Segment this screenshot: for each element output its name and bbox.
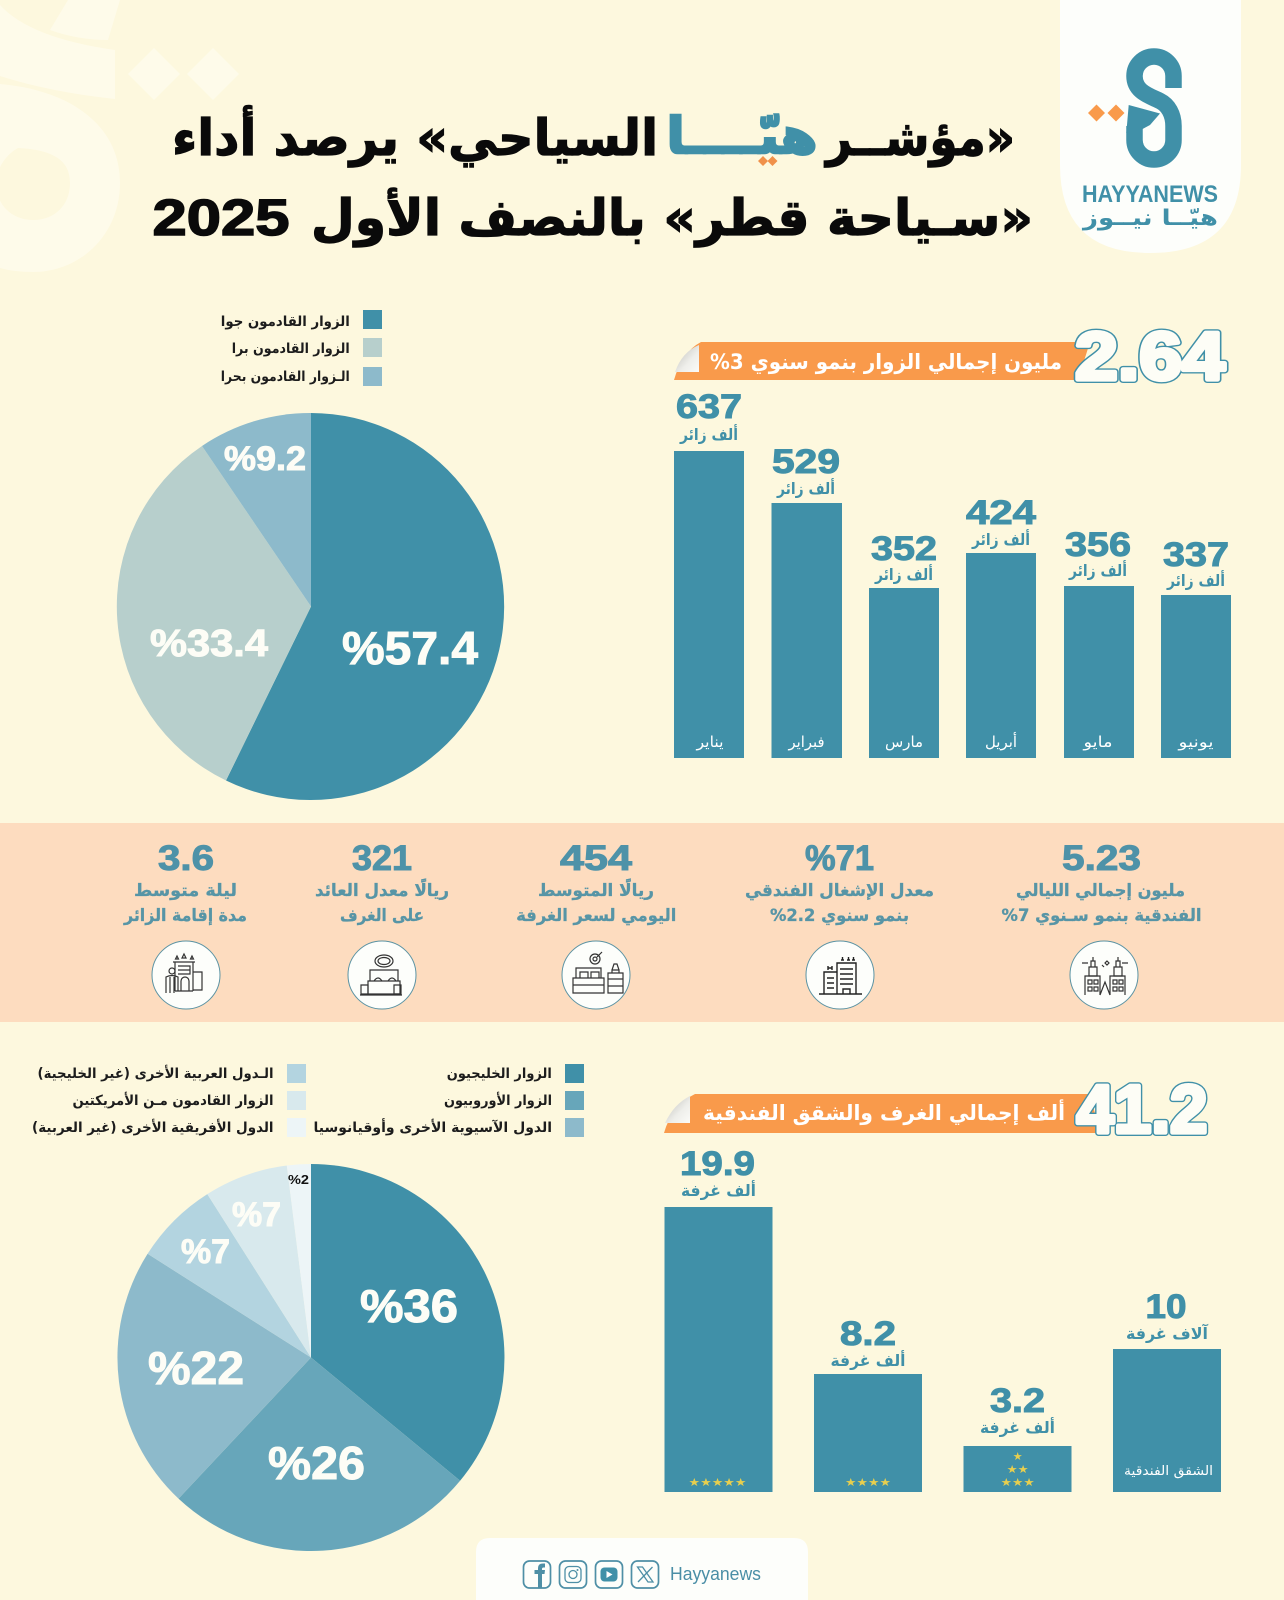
bar chart: rooms by category	[664, 1145, 1221, 1492]
header: total visitors: مليون إجمالي الزوار بنمو سنوي 3%	[710, 350, 1062, 375]
header: total rooms	[664, 1072, 1208, 1148]
title: «مؤشــر	[823, 109, 1015, 168]
stat: average stay: مدة إقامة الزائر	[123, 906, 247, 926]
stat: occupancy: بنمو سنوي 2.2%	[770, 906, 909, 926]
stat: revenue per room	[315, 839, 449, 1009]
stat: revenue per room: 321	[352, 839, 412, 878]
bar chart: rooms by category: ★★★★	[845, 1476, 891, 1489]
stat: revenue per room: ريالًا معدل العائد	[315, 877, 449, 901]
icon: page curl	[665, 1096, 690, 1123]
big number: 41.2	[1076, 1072, 1208, 1148]
big number: 41.2	[1076, 1072, 1208, 1148]
bar chart: monthly visitors: ألف زائر	[1166, 570, 1225, 590]
big number: 2.64	[1075, 318, 1225, 394]
title	[152, 105, 1033, 248]
bar chart: monthly visitors: ألف زائر	[679, 424, 738, 444]
icon: facebook	[524, 1561, 550, 1588]
bar chart: rooms by category: ★	[1013, 1450, 1023, 1463]
ribbon	[664, 1094, 1100, 1133]
pie chart: visitor origin: %7	[181, 1233, 230, 1271]
bar chart: monthly visitors: ألف زائر	[971, 529, 1030, 549]
legend: visitor origin: الـدول العربية الأخرى (غير الخليجية)	[38, 1065, 274, 1082]
stat: hotel nights: 5.23	[1062, 839, 1141, 878]
bar chart: monthly visitors: فبراير	[788, 733, 824, 751]
bar chart: monthly visitors: 637	[676, 388, 742, 426]
legend: arrivals by mode: الـزوار القادمون بحرا	[221, 369, 350, 385]
legend: visitor origin: الدول الأفريقية الأخرى (غير العربية)	[32, 1119, 274, 1136]
title: 2025	[152, 189, 290, 246]
stat: average stay	[123, 839, 247, 1009]
icon: logo mark	[1088, 56, 1174, 160]
pie chart: visitor origin: %7	[232, 1196, 281, 1234]
title: هيّــــا	[666, 107, 818, 165]
title: «سـياحة قطر» بالنصف الأول	[311, 187, 1033, 248]
icon: page curl	[675, 345, 699, 372]
stat: hotel nights: مليون إجمالي الليالي	[1016, 881, 1185, 901]
pie chart: visitor origin: %2	[288, 1172, 309, 1187]
icon: instagram	[560, 1561, 586, 1588]
stat: average stay: ليلة متوسط	[134, 881, 237, 901]
legend: arrivals by mode: الزوار القادمون جوا	[221, 314, 350, 330]
stat: average stay: 3.6	[158, 839, 214, 878]
legend: visitor origin: الزوار القادمون مـن الأمريكتين	[72, 1092, 274, 1109]
pie chart: visitor origin: %26	[268, 1437, 365, 1489]
pie chart: arrivals by mode	[117, 413, 504, 800]
stat: average daily rate	[516, 839, 676, 1009]
footer: social links	[476, 1538, 808, 1600]
title: السياحي» يرصد أداء	[172, 105, 658, 168]
bar chart: monthly visitors: يناير	[695, 733, 724, 751]
bar chart: rooms by category: ★★	[1007, 1463, 1029, 1476]
bar chart: rooms by category: ★★★	[1001, 1476, 1035, 1489]
bar chart: rooms by category: ألف غرفة	[830, 1350, 906, 1370]
logo panel	[1060, 0, 1241, 253]
stat: revenue per room: على الغرف	[340, 906, 424, 926]
bar chart: rooms by category: ألف غرفة	[681, 1180, 756, 1200]
logo wordmark arabic: هيّــا نيــوز	[1082, 206, 1218, 231]
legend: visitor origin: الزوار الأوروبيون	[444, 1092, 552, 1109]
pie chart: visitor origin: %36	[360, 1280, 458, 1332]
legend: arrivals by mode: الزوار القادمون برا	[232, 341, 350, 357]
pie chart: arrivals by mode: %33.4	[150, 623, 268, 665]
panel: key stats band	[0, 823, 1284, 1022]
bar chart: monthly visitors: 352	[871, 530, 937, 568]
bar chart: monthly visitors: مايو	[1082, 733, 1112, 751]
bar chart: monthly visitors: 529	[772, 443, 840, 481]
bar chart: rooms by category: 3.2	[990, 1382, 1045, 1420]
bar chart: rooms by category: 10	[1146, 1288, 1186, 1326]
bar chart: rooms by category: 19.9	[680, 1145, 755, 1183]
stat: occupancy	[745, 839, 934, 1009]
stat: occupancy: معدل الإشغال الفندقي	[745, 881, 934, 901]
legend: visitor origin: الدول الآسيوية الأخرى وأوقيانوسيا	[314, 1118, 552, 1136]
bar chart: rooms by category: ★★★★★	[688, 1476, 747, 1489]
header: total visitors	[674, 318, 1225, 394]
legend: visitor origin	[32, 1064, 584, 1137]
pie chart: arrivals by mode: %9.2	[224, 440, 306, 478]
pie chart: visitor origin: %22	[148, 1342, 244, 1394]
stat: average daily rate: ريالًا المتوسط	[538, 877, 654, 901]
background watermark logo	[0, 0, 239, 272]
ribbon	[674, 342, 1090, 380]
bar chart: monthly visitors: ألف زائر	[1068, 560, 1127, 580]
bar chart: monthly visitors: أبريل	[985, 732, 1017, 751]
bar chart: rooms by category: 8.2	[840, 1315, 896, 1353]
bar chart: monthly visitors: 356	[1065, 526, 1131, 564]
handle: Hayyanews	[670, 1563, 761, 1584]
logo wordmark english: HAYYANEWS	[1082, 181, 1218, 208]
bar chart: rooms by category: الشقق الفندقية	[1124, 1464, 1213, 1479]
bar chart: monthly visitors	[674, 388, 1231, 758]
big number: 2.64	[1075, 318, 1225, 394]
icon: x	[632, 1561, 658, 1588]
pie chart: visitor origin	[117, 1164, 504, 1551]
legend: visitor origin: الزوار الخليجيون	[447, 1066, 552, 1082]
stat: hotel nights: الفندقية بنمو سـنوي 7%	[1002, 906, 1202, 926]
stat: average daily rate: 454	[560, 839, 633, 878]
bar chart: monthly visitors: ألف زائر	[776, 478, 835, 498]
bar chart: rooms by category: آلاف غرفة	[1126, 1323, 1209, 1343]
legend: arrivals by mode	[221, 310, 382, 386]
stat: occupancy: %71	[805, 839, 874, 878]
bar chart: rooms by category: ألف غرفة	[980, 1417, 1055, 1437]
stat: hotel nights	[1002, 839, 1202, 1009]
icon: youtube	[596, 1561, 622, 1588]
bar chart: monthly visitors: مارس	[885, 733, 923, 751]
bar chart: monthly visitors: ألف زائر	[874, 564, 933, 584]
pie chart: arrivals by mode: %57.4	[342, 622, 478, 674]
stat: average daily rate: اليومي لسعر الغرفة	[516, 906, 676, 926]
header: total rooms: ألف إجمالي الغرف والشقق الفندقية	[703, 1098, 1065, 1125]
bar chart: monthly visitors: يونيو	[1177, 733, 1214, 751]
bar chart: monthly visitors: 337	[1163, 536, 1229, 574]
bar chart: monthly visitors: 424	[966, 494, 1036, 532]
